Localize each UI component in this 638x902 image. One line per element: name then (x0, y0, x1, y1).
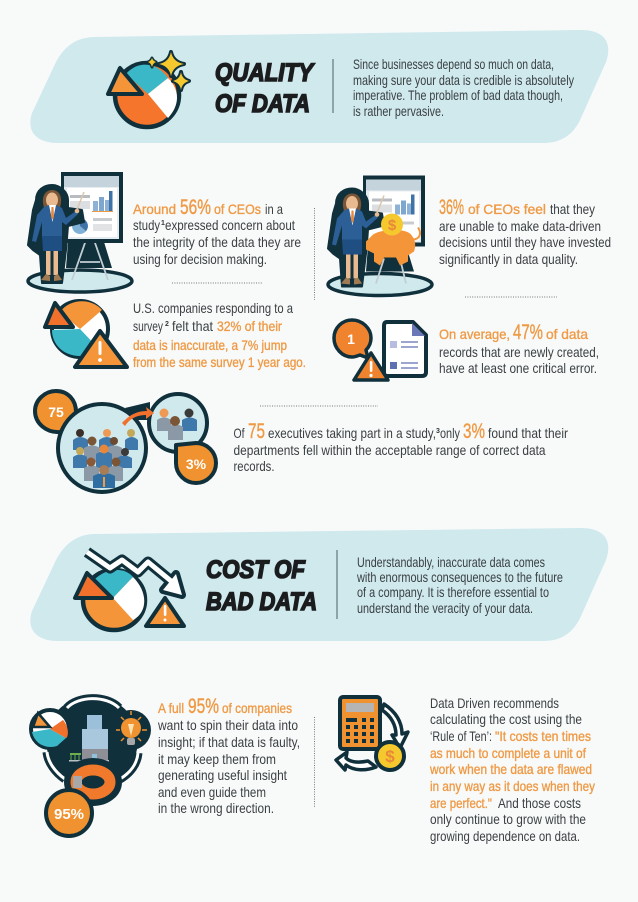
text block: 32 percent inaccurate: 2 (165, 321, 169, 328)
text block: rule of ten: are perfect." (430, 795, 492, 811)
text block: quality intro: making sure your data is credible is absolutely (353, 72, 574, 88)
text block: 47 percent of records: 47% (513, 321, 543, 344)
text block: 75 executives: records. (234, 458, 274, 474)
text block: rule of ten: ‘Rule of Ten’: (430, 728, 492, 744)
text block: 75 executives: 3% (463, 420, 485, 443)
icon: piggy bank with coin: $ (388, 217, 397, 234)
text block: rule of ten: growing dependence on data. (430, 828, 580, 844)
text block: rule of ten: And those costs (498, 795, 581, 811)
text block: 56 percent of CEOs (133, 196, 301, 267)
icon: presenter with piggy bank (328, 176, 432, 296)
text block: cost intro: of a company. It is therefore essential to (357, 584, 549, 600)
text block: 36 percent of CEOs: of CEOs feel (468, 201, 546, 217)
text block: rule of ten: only continue to grow with the (430, 811, 586, 827)
text block: 75 executives (234, 420, 568, 474)
text block: 95 percent of companies: 95% (188, 695, 219, 718)
text block: rule of ten: as much to complete a unit of (430, 745, 586, 761)
text block: 75 executives: executives taking part in a study, (268, 425, 436, 441)
bubble: 75 (35, 391, 77, 432)
arrow: to small group (122, 407, 154, 426)
text block: 36 percent of CEOs (439, 196, 611, 267)
text block: 32 percent inaccurate: U.S. companies responding to a (133, 300, 293, 316)
title: cost of bad data: BAD DATA (206, 588, 317, 616)
text block: quality intro: is rather pervasive. (353, 103, 444, 119)
text block: 47 percent of records: records that are newly created, (439, 344, 599, 360)
text block: 75 executives: only (440, 425, 460, 441)
people: small group (157, 408, 197, 440)
text block: 75 executives: Of (234, 425, 245, 441)
title: quality of data (215, 59, 315, 118)
text block: rule of ten: work when the data are flawed (429, 761, 592, 777)
text block: cost intro: with enormous consequences to the future (356, 569, 563, 585)
text block: 95 percent of companies: of companies (222, 700, 292, 716)
text block: 47 percent of records: have at least one critical error. (439, 360, 597, 376)
text block: 95 percent of companies: it may keep them from (158, 751, 276, 767)
text block: 56 percent of CEOs: study (133, 217, 160, 233)
orange donut (71, 765, 115, 799)
text block: rule of ten: in any way as it does when they (430, 778, 595, 794)
icon: business insight cycle (31, 696, 151, 836)
text block: 75 executives: 3 (436, 428, 440, 435)
text block: cost intro: understand the veracity of your data. (357, 600, 533, 616)
icon: document with error alert (334, 320, 426, 380)
text block: 32 percent inaccurate: survey (133, 318, 163, 334)
text block: 56 percent of CEOs: 56% (180, 196, 211, 219)
title: quality of data: QUALITY (215, 59, 315, 87)
icon: pie chart with sparkles (108, 52, 189, 127)
text block: 95 percent of companies: want to spin their data into (157, 717, 298, 733)
text block: 56 percent of CEOs: 1 (161, 220, 165, 227)
text block: 36 percent of CEOs: significantly in data quality. (439, 251, 578, 267)
text block: rule of ten: Data Driven recommends (430, 695, 559, 711)
text block: 47 percent of records: On average, (439, 326, 510, 342)
text block: 95 percent of companies: A full (158, 700, 184, 716)
text block: rule of ten (429, 695, 595, 844)
text block: 32 percent inaccurate: felt that (172, 318, 213, 334)
small pie chart (31, 710, 69, 748)
text block: 47 percent of records (439, 321, 599, 376)
text block: 56 percent of CEOs: the integrity of the data they are (133, 234, 301, 250)
text block: quality intro: Since businesses depend so much on data, (353, 56, 554, 72)
text block: 36 percent of CEOs: are unable to make data-driven (439, 218, 601, 234)
text block: 75 executives: 75 (248, 420, 265, 443)
text block: 56 percent of CEOs: in a (265, 201, 283, 217)
text block: cost intro: Understandably, inaccurate data comes (357, 554, 545, 570)
text block: 32 percent inaccurate: from the same survey 1 year ago. (133, 354, 306, 370)
icon: calculator with coin: $ (385, 747, 395, 766)
title: cost of bad data (206, 556, 317, 616)
icon: document with error alert: 1 (347, 331, 355, 347)
icon: presenter with chart board (28, 172, 132, 292)
panel: cost of bad data banner (30, 528, 608, 641)
bubble: 75: 75 (48, 404, 64, 420)
text block: cost intro (356, 554, 563, 616)
text block: 75 executives: departments fell within the acceptable range of correct data (234, 442, 546, 458)
text block: 75 executives: found that their (488, 425, 568, 441)
title: quality of data: OF DATA (215, 90, 310, 118)
text block: rule of ten: calculating the cost using the (430, 711, 582, 727)
text block: 32 percent inaccurate (133, 300, 306, 370)
icon: falling pie with warning (75, 552, 184, 630)
light bulb (111, 710, 151, 750)
text block: 56 percent of CEOs: Around (133, 201, 176, 217)
text block: 56 percent of CEOs: using for decision making. (133, 251, 267, 267)
text block: 95 percent of companies: in the wrong direction. (158, 800, 274, 816)
people: large group (73, 429, 138, 488)
icon: calculator with coin (336, 697, 408, 770)
text block: rule of ten: "It costs ten times (495, 728, 591, 744)
bubble: 3 percent: 3% (186, 456, 207, 472)
text block: 95 percent of companies: and even guide them (158, 784, 266, 800)
bubble: 95 percent: 95% (54, 806, 84, 823)
text block: 47 percent of records: of data (546, 326, 588, 342)
bubble: 3 percent (176, 443, 216, 483)
text block: 32 percent inaccurate: data is inaccurate, a 7% jump (133, 337, 287, 353)
text block: 95 percent of companies: generating useful insight (158, 767, 287, 783)
text block: 56 percent of CEOs: expressed concern about (165, 217, 295, 233)
text block: 36 percent of CEOs: that they (550, 201, 595, 217)
text block: quality intro: imperative. The problem of bad data though, (353, 87, 563, 103)
text block: 56 percent of CEOs: of CEOs (214, 201, 261, 217)
text block: 95 percent of companies (157, 695, 300, 816)
icon: group of executives (35, 391, 216, 492)
text block: 36 percent of CEOs: 36% (439, 196, 464, 219)
text block: quality intro (353, 56, 574, 119)
title: cost of bad data: COST OF (206, 556, 306, 584)
text block: 32 percent inaccurate: 32% of their (217, 318, 282, 334)
office building (69, 715, 109, 762)
icon: pie chart with warning (45, 301, 127, 367)
text block: 95 percent of companies: insight; if that data is faulty, (158, 734, 300, 750)
panel: quality of data banner (30, 30, 608, 143)
